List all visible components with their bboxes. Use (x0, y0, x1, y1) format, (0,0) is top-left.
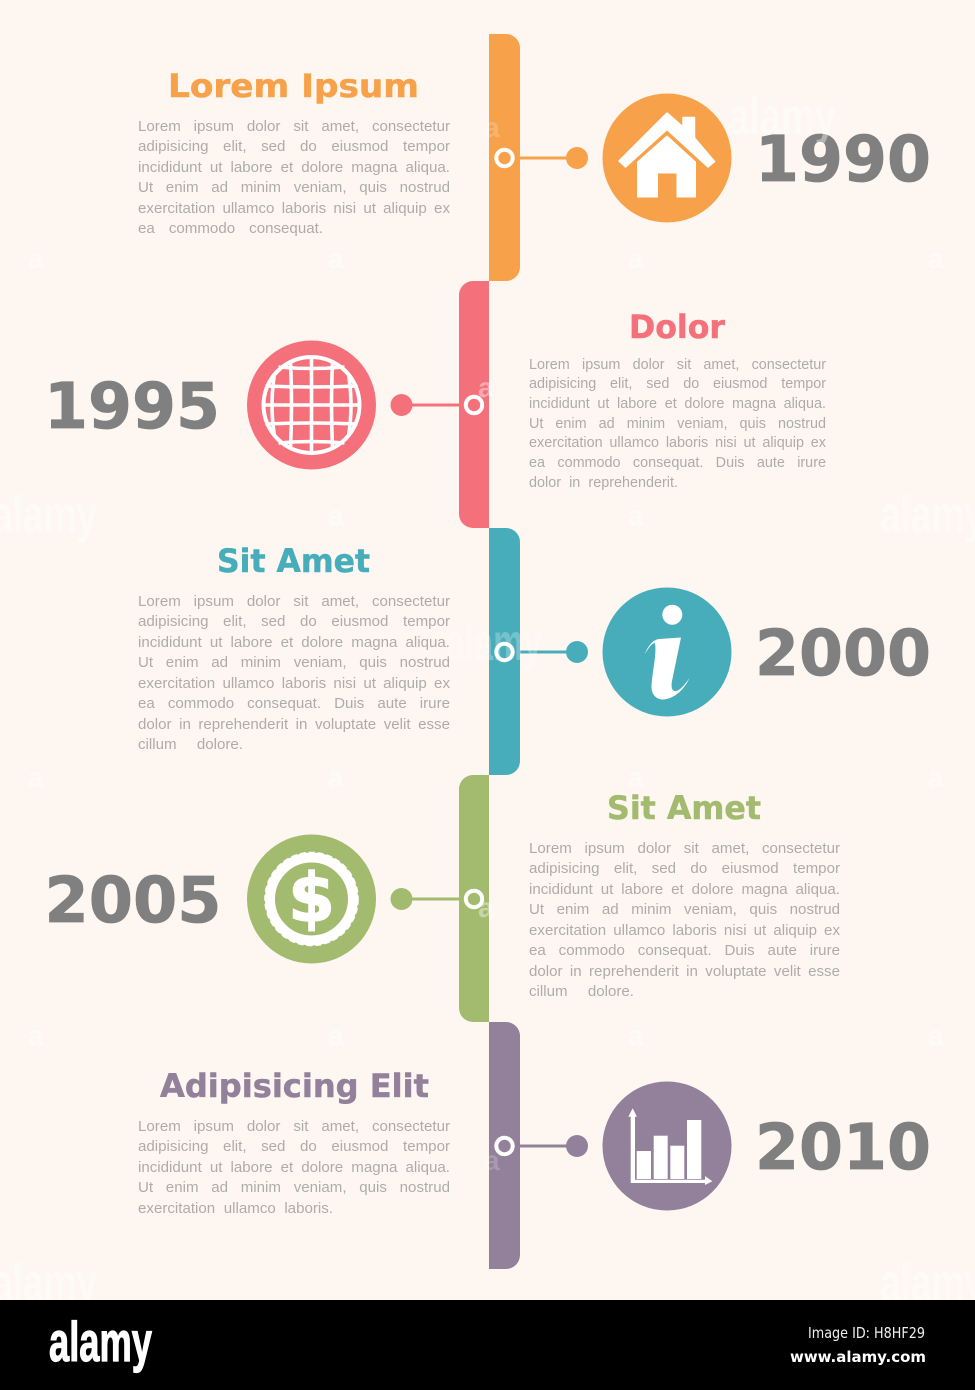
text block: Dolor description: Ut enim ad minim veniam, quis nostrud (529, 416, 826, 432)
text block: Sit Amet description: Ut enim ad minim veniam, quis nostrud (529, 901, 840, 918)
text block: Dolor description: ea commodo consequat. Duis aute irure (529, 455, 826, 471)
text block: Dolor description: incididunt ut labore et dolore magna aliqua. (529, 396, 826, 412)
text block: Adipisicing Elit description: Lorem ipsum dolor sit amet, consectetur (138, 1118, 450, 1134)
text block: Sit Amet description: cillum dolore. (529, 983, 634, 1000)
connector: pink (390, 394, 482, 416)
year: 2005: 2005 (44, 864, 222, 937)
year: 2000: 2000 (755, 617, 931, 690)
text block: Dolor description: Lorem ipsum dolor sit amet, consectetur (529, 356, 826, 372)
text block: Dolor description: adipisicing elit, sed do eiusmod tempor (529, 376, 826, 392)
watermarks: a (28, 1020, 44, 1051)
text block: Sit Amet description: dolor in reprehenderit in voluptate velit esse (529, 962, 840, 980)
text block: Sit Amet description: adipisicing elit, sed do eiusmod tempor (138, 613, 450, 630)
heading: Sit Amet: Sit Amet (217, 542, 370, 580)
watermarks: a (328, 243, 344, 274)
watermarks: alamy (446, 614, 542, 672)
watermarks: a (328, 500, 344, 531)
watermarks: a (328, 1020, 344, 1051)
connector: purple (496, 1135, 588, 1157)
text block: Sit Amet description: adipisicing elit, sed do eiusmod tempor (529, 860, 840, 877)
connector: orange (496, 147, 588, 169)
watermarks: a (928, 762, 944, 793)
text block: Lorem Ipsum description: adipisicing elit, sed do eiusmod tempor (138, 138, 450, 155)
text block: Sit Amet description: cillum dolore. (138, 736, 243, 753)
text block: Adipisicing Elit description: Ut enim ad minim veniam, quis nostrud (138, 1179, 450, 1196)
panel: 2010 Adipisicing Elit (138, 1022, 931, 1269)
text block: Lorem Ipsum description: exercitation ullamco laboris nisi ut aliquip ex (138, 200, 450, 216)
text block: Sit Amet description (138, 592, 450, 753)
watermarks: a (628, 1020, 644, 1051)
heading: Lorem Ipsum: Lorem Ipsum (168, 67, 419, 105)
text block: Sit Amet description: Ut enim ad minim veniam, quis nostrud (138, 654, 450, 671)
logo: alamy: alamy (49, 1310, 152, 1373)
watermarks: a (484, 1145, 500, 1176)
year: 2010: 2010 (755, 1111, 931, 1184)
timeline segment: purple (489, 1022, 520, 1269)
watermarks: a (484, 112, 500, 143)
panel: 1995 Dolor (44, 281, 826, 528)
text block: Lorem Ipsum description: ea commodo consequat. (138, 220, 323, 237)
text block: Sit Amet description: exercitation ullamco laboris nisi ut aliquip ex (138, 674, 450, 692)
text block: Dolor description: dolor in reprehenderit. (529, 475, 678, 491)
timeline segment: green (459, 775, 489, 1022)
watermarks: a (28, 243, 44, 274)
panel: 1990 Lorem Ipsum (138, 34, 931, 281)
text block: Dolor description (529, 356, 826, 491)
icon: dollar coin: $ (288, 859, 335, 937)
text block: Sit Amet description: ea commodo consequat. Duis aute irure (138, 695, 450, 712)
icon: house (602, 94, 732, 222)
text block: Adipisicing Elit description: adipisicing elit, sed do eiusmod tempor (138, 1138, 450, 1155)
footer bar: alamy (0, 1300, 975, 1390)
text block: Sit Amet description: exercitation ullamco laboris nisi ut aliquip ex (529, 922, 840, 938)
text block: Adipisicing Elit description: exercitation ullamco laboris. (138, 1200, 333, 1216)
heading: Dolor: Dolor (629, 308, 725, 346)
year: 1995: 1995 (44, 370, 220, 443)
watermarks: a (628, 500, 644, 531)
connector: teal (496, 641, 588, 663)
watermarks: a (628, 762, 644, 793)
icon: bar chart (602, 1082, 732, 1210)
watermarks: a (478, 372, 494, 403)
text block: Lorem Ipsum description: Lorem ipsum dolor sit amet, consectetur (138, 118, 450, 134)
watermarks: a (28, 762, 44, 793)
panel: 2005 Sit Amet (44, 775, 840, 1022)
image id: Image ID: H8HF29 (808, 1324, 925, 1342)
icon: globe (247, 340, 376, 470)
timeline segment: teal (489, 528, 520, 775)
year: 1990: 1990 (755, 123, 931, 196)
text block: Sit Amet description: dolor in reprehenderit in voluptate velit esse (138, 716, 450, 732)
timeline segment: orange (489, 34, 520, 281)
connector: green (390, 888, 482, 910)
website: www.alamy.com (790, 1348, 926, 1366)
watermarks: a (628, 243, 644, 274)
text block: Lorem Ipsum description (138, 118, 450, 237)
watermarks: alamy (728, 88, 836, 146)
watermarks: a (478, 892, 494, 923)
watermarks: a (928, 1020, 944, 1051)
text block: Sit Amet description: Lorem ipsum dolor sit amet, consectetur (529, 840, 840, 856)
text block: Lorem Ipsum description: Ut enim ad minim veniam, quis nostrud (138, 179, 450, 196)
text block: Sit Amet description: Lorem ipsum dolor sit amet, consectetur (138, 592, 450, 610)
text block: Sit Amet description: ea commodo consequat. Duis aute irure (529, 942, 840, 959)
icon: info (602, 588, 732, 716)
text block: Adipisicing Elit description (138, 1118, 450, 1216)
text block: Sit Amet description: incididunt ut labore et dolore magna aliqua. (529, 880, 840, 898)
heading: Adipisicing Elit: Adipisicing Elit (160, 1067, 429, 1105)
panel: 2000 Sit Amet (138, 528, 931, 775)
watermarks: a (328, 762, 344, 793)
text block: Dolor description: exercitation ullamco laboris nisi ut aliquip ex (529, 435, 826, 451)
timeline segment: pink (459, 281, 489, 528)
text block: Lorem Ipsum description: incididunt ut labore et dolore magna aliqua. (138, 158, 450, 176)
watermarks: a (928, 243, 944, 274)
text block: Sit Amet description: incididunt ut labore et dolore magna aliqua. (138, 634, 450, 650)
heading: Sit Amet: Sit Amet (607, 789, 761, 827)
text block: Sit Amet description (529, 840, 840, 1000)
text block: Adipisicing Elit description: incididunt ut labore et dolore magna aliqua. (138, 1158, 450, 1176)
icon: dollar coin (247, 834, 376, 964)
